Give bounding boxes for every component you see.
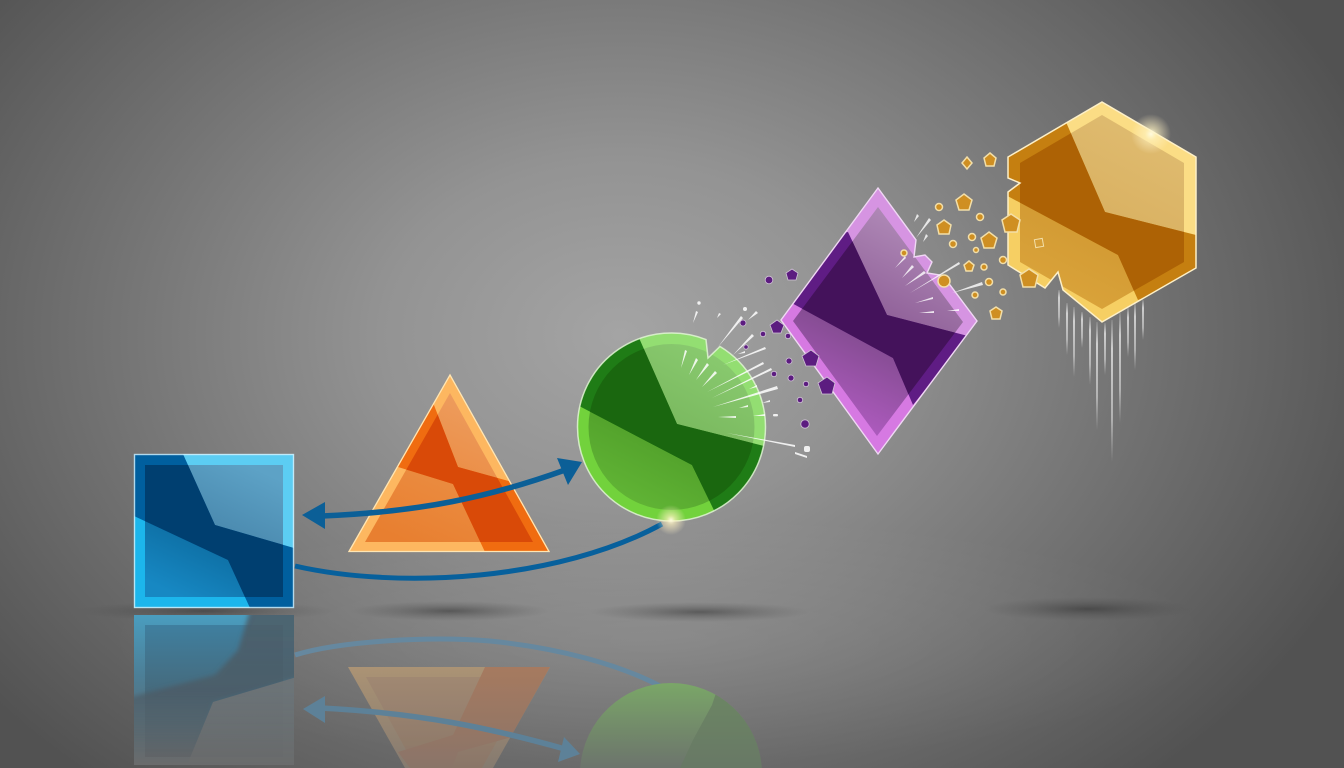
reflection of circle	[580, 683, 770, 768]
reflection of curved arrow	[295, 639, 660, 686]
blue square	[134, 454, 294, 608]
hexagon falling streaks	[1058, 290, 1144, 462]
reflection of square	[134, 615, 294, 765]
reflection of triangle	[348, 667, 550, 768]
green circle	[576, 332, 766, 522]
hexagon sparkle	[1131, 114, 1171, 154]
amber fragments	[901, 153, 1044, 319]
double-headed arrow	[302, 458, 582, 529]
ground shadows	[75, 597, 1193, 622]
white sparks from diamond	[895, 214, 983, 313]
white sparks from circle	[681, 301, 810, 458]
lower curved arrow	[295, 524, 662, 578]
orange triangle	[348, 374, 550, 552]
reflection of double arrow	[303, 696, 580, 762]
amber hexagon	[1000, 102, 1200, 322]
purple fragments	[740, 269, 835, 428]
glow at circle base	[656, 505, 686, 535]
purple diamond	[781, 188, 977, 454]
